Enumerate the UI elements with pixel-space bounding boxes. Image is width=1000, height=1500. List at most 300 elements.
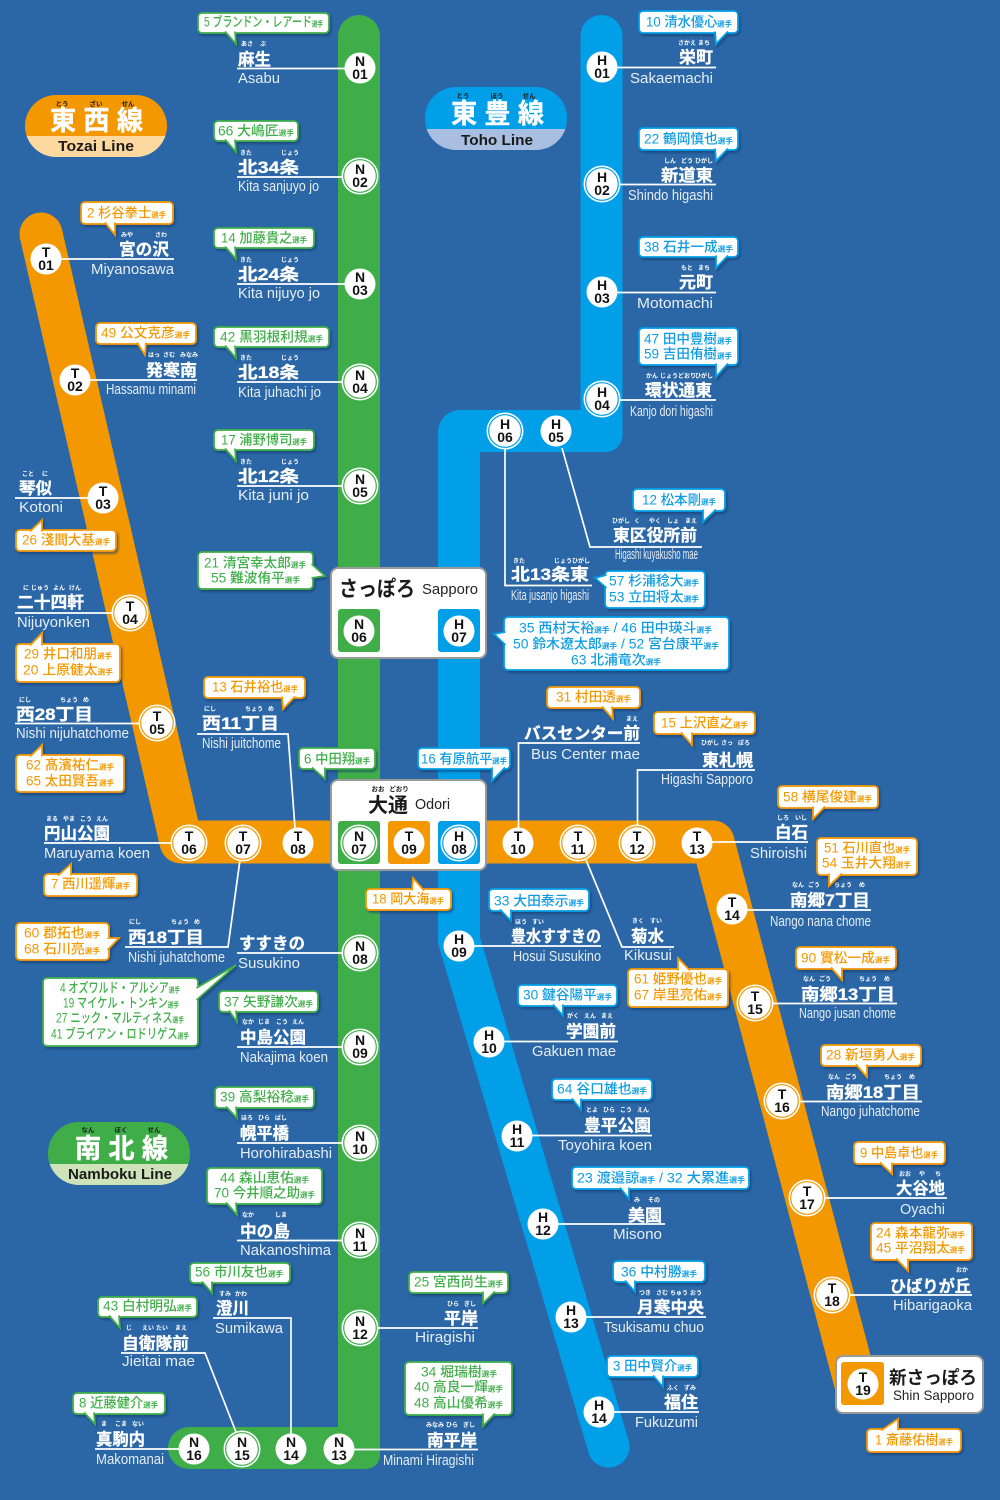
badge: Namboku Line: 南 北 線 (75, 1134, 168, 1164)
callout: 44 森山恵佑 / 70 今井順之助 (207, 1168, 322, 1215)
station label: 月寒中央: ちゅう (670, 1289, 688, 1297)
station label: 宮の沢: 宮の沢 (119, 240, 170, 259)
station label: 白石: 白石 (775, 823, 808, 842)
markers: Tozai line stations: 02 (67, 378, 83, 394)
callout: 35 西村天裕 / 46 田中瑛斗 / 50 鈴木遼太郎 / 52 宮台康平 / 63 北浦竜次 (494, 617, 729, 670)
markers: Namboku line stations: 09 (352, 1045, 368, 1061)
markers: Namboku line stations: N (355, 1225, 365, 1241)
callout: 13 石井裕也: 13 石井裕也選手 (212, 680, 298, 694)
callout: 90 實松一成: 90 實松一成選手 (801, 950, 891, 966)
callout: 7 西川遥輝 (44, 864, 137, 896)
markers: Toho line stations: 06 (497, 429, 513, 445)
station box: Shin Sapporo: 新さっぽろ (889, 1367, 977, 1388)
callout: 1 斎藤佑樹 (867, 1419, 961, 1452)
markers: Toho line stations: 01 (594, 65, 610, 81)
station label: 環状通東: Kanjo dori higashi (630, 404, 713, 420)
markers: Tozai line stations: T (574, 828, 583, 844)
callout: 44 森山恵佑 / 70 今井順之助: 70 今井順之助選手 (214, 1184, 315, 1200)
callout: 9 中島卓也 (854, 1142, 945, 1174)
station box: Odori: 09 (401, 841, 417, 857)
station box: Odori: 08 (451, 841, 467, 857)
station label: 北34条: じょう (281, 149, 299, 157)
markers: Tozai line stations: 14 (724, 907, 740, 923)
callout: 38 石井一成: 38 石井一成選手 (644, 240, 734, 254)
station box: Sapporo: N (354, 616, 364, 632)
markers: Tozai line stations: 06 (181, 841, 197, 857)
callout: 6 中田翔: 6 中田翔選手 (304, 752, 370, 766)
station box: Sapporo: H (454, 616, 464, 632)
station label: 東札幌: さっ (721, 740, 733, 747)
station label: 西11丁目: にし (204, 706, 216, 713)
station label: 真駒内: ま (101, 1421, 107, 1428)
markers: Toho line stations: 09 (451, 944, 467, 960)
callout: 28 新垣勇人: 28 新垣勇人選手 (826, 1048, 916, 1062)
station label: 北18条: じょう (281, 354, 299, 362)
callout: 47 田中豊樹 / 59 吉田侑樹 (639, 328, 738, 377)
station label: 南郷7丁目 (747, 881, 871, 930)
callout: 57 杉浦稔大 / 53 立田将太 (595, 571, 705, 608)
callout: 18 岡大海 (366, 878, 451, 910)
station label: ひばりが丘: ひばりが丘 (890, 1276, 971, 1296)
station label: 福住: Fukuzumi (635, 1415, 698, 1431)
station label: 麻生: ぶ (260, 41, 266, 48)
markers: Tozai line stations: T (239, 828, 248, 844)
callout: 58 横尾俊建 (778, 786, 878, 819)
station label: 中島公園: えん (292, 1018, 304, 1026)
markers: Toho line stations: 04 (594, 397, 610, 413)
station box: Odori: おお (372, 785, 385, 793)
station label: 新道東: ひがし (695, 157, 713, 165)
callout: 15 上沢直之 (654, 712, 755, 745)
callout: 8 近藤健介 (73, 1393, 165, 1424)
callout: 25 宮西尚生: 25 宮西尚生選手 (414, 1274, 504, 1290)
station label: 中の島: しま (275, 1212, 287, 1219)
station label: 北34条: きた (240, 149, 252, 157)
station label: 西11丁目: め (268, 706, 274, 713)
callout: 14 加藤貴之 (214, 228, 314, 259)
station label: 大谷地: おお (899, 1171, 911, 1178)
markers: Namboku line stations: 12 (352, 1326, 368, 1342)
badge: Namboku Line: なん (82, 1125, 95, 1134)
markers: Namboku line stations: N (237, 1434, 247, 1450)
station box: Shin Sapporo: T (859, 1369, 868, 1385)
station label: 白石: いし (795, 815, 807, 822)
station label: 美園: 美園 (628, 1206, 662, 1225)
markers: Toho line stations (444, 52, 620, 1428)
station label: 発寒南: さむ (163, 352, 175, 359)
markers: Tozai line stations: T (126, 598, 135, 614)
callout: 62 髙濱祐仁 / 65 太田賢吾: 62 髙濱祐仁選手 (26, 756, 115, 772)
station label: 北24条: きた (240, 256, 252, 264)
station label: 二十四軒: けん (69, 585, 81, 592)
station label: 豊平公園: ひら (603, 1107, 615, 1114)
station box: Odori: Odori (415, 796, 450, 813)
callout: 56 市川友也 (190, 1263, 290, 1293)
station label: 東区役所前 (562, 448, 702, 563)
station label: 幌平橋: 幌平橋 (240, 1124, 289, 1143)
markers: Namboku line stations: N (334, 1434, 344, 1450)
station label: 元町 (617, 264, 716, 312)
callout: 43 白村明弘 (98, 1297, 197, 1328)
station label: 宮の沢: Miyanosawa (91, 262, 175, 278)
markers: Namboku line stations: N (355, 1032, 365, 1048)
station label: 栄町: さかえ (678, 39, 696, 47)
station label: 北12条: じょう (281, 458, 299, 466)
markers: Toho line stations: H (597, 384, 607, 400)
callout: 24 森本龍弥 / 45 平沼翔太: 24 森本龍弥選手 (876, 1224, 966, 1240)
markers: Toho line stations: H (512, 1121, 522, 1137)
markers: Namboku line stations: N (355, 1313, 365, 1329)
callout: 18 岡大海: 18 岡大海選手 (372, 892, 444, 906)
station label: 南郷18丁目: ごう (845, 1073, 857, 1081)
station label: 大谷地: 大谷地 (896, 1179, 945, 1198)
callout: 10 清水優心 (639, 11, 738, 44)
station label: 自衛隊前: えい (142, 1324, 154, 1332)
station label: 北18条 (237, 354, 345, 401)
badge: Tozai Line: Tozai Line (58, 138, 134, 155)
station label: 北18条: きた (240, 354, 252, 362)
markers: Toho line stations: 02 (594, 182, 610, 198)
station label: 菊水: きく (632, 918, 644, 925)
station label: 自衛隊前: たい (156, 1324, 168, 1332)
callout: 49 公文克彦: 49 公文克彦選手 (101, 326, 191, 340)
station label: 澄川: すみ (219, 1291, 231, 1298)
callout: 5 ブランドン・レアード (198, 13, 329, 44)
station label: 琴似: 琴似 (19, 479, 52, 498)
line: Toho (438, 15, 630, 1468)
markers: Toho line stations: H (597, 277, 607, 293)
callout: 22 鶴岡慎也: 22 鶴岡慎也選手 (644, 130, 734, 146)
callout: 34 堀瑞樹 / 40 高良一輝 / 48 高山優希: 34 堀瑞樹選手 (421, 1364, 498, 1380)
station label: 南郷7丁目: ごう (808, 881, 820, 889)
station label: 円山公園: Maruyama koen (44, 846, 150, 862)
station label: 環状通東: 環状通東 (645, 381, 713, 400)
station label: 中島公園: じま (258, 1019, 270, 1026)
station box: Sapporo: Sapporo (422, 581, 478, 598)
markers: Namboku line stations (178, 52, 378, 1468)
station label: 美園 (558, 1197, 665, 1243)
station label: 月寒中央 (586, 1289, 706, 1336)
station label: 西28丁目 (15, 696, 140, 742)
callout: 31 村田透: 31 村田透選手 (556, 690, 632, 704)
badge: Tozai Line: とう (56, 99, 68, 108)
station label: 円山公園: やま (63, 815, 75, 823)
station label: 南平岸: みなみ (426, 1421, 444, 1429)
markers: Tozai line stations (30, 244, 850, 1314)
badge: Namboku Line: ぼく (114, 1125, 128, 1134)
station label: 西28丁目: にし (19, 697, 31, 704)
station label: 豊平公園: こう (620, 1106, 632, 1114)
markers: Tozai line stations: 05 (149, 721, 165, 737)
markers: Tozai line stations: T (185, 828, 194, 844)
callout: 4 foreign players (43, 965, 236, 1046)
station label: 平岸: ぎし (464, 1300, 476, 1308)
station label: 環状通東: どおり (678, 372, 696, 380)
callout: 14 加藤貴之: 14 加藤貴之選手 (221, 230, 307, 246)
station label: 発寒南: みなみ (180, 351, 198, 359)
station label: 北24条: 北24条 (238, 264, 300, 284)
markers: Toho line stations: H (566, 1302, 576, 1318)
callout: 62 髙濱祐仁 / 65 太田賢吾: 65 太田賢吾選手 (26, 774, 115, 788)
station label: 北24条: Kita nijuyo jo (238, 286, 320, 302)
station label: 新道東: しん (664, 158, 676, 165)
station label: 月寒中央: Tsukisamu chuo (604, 1320, 704, 1336)
station label: 南平岸: ぎし (463, 1421, 475, 1429)
station label: 中の島 (237, 1211, 345, 1259)
station box: Odori: T (405, 828, 414, 844)
station label: 南郷18丁目 (797, 1073, 922, 1120)
station label: 南郷18丁目: 南郷18丁目 (826, 1083, 920, 1102)
markers: Toho line stations: 11 (510, 1134, 525, 1150)
markers: Tozai line stations: T (693, 828, 702, 844)
station label: 中島公園: こう (276, 1018, 288, 1026)
station label: 中の島: なか (242, 1211, 254, 1219)
callout: 57 杉浦稔大 / 53 立田将太: 53 立田将太選手 (609, 590, 700, 604)
station label: 琴似: に (42, 471, 48, 478)
station box: Shin Sapporo: 19 (855, 1382, 871, 1398)
station label: 福住 (614, 1384, 699, 1431)
markers: Toho line stations: 12 (535, 1222, 551, 1238)
callout: 24 森本龍弥 / 45 平沼翔太: 45 平沼翔太選手 (876, 1240, 966, 1256)
station label: 北34条 (237, 149, 345, 195)
callout: 29 井口和朋 / 20 上原健太 (16, 633, 120, 682)
callout: 61 姫野優也 / 67 岸里亮佑: 67 岸里亮佑選手 (634, 986, 723, 1002)
callout: 2 杉谷拳士 (81, 202, 173, 235)
station label: 北13条東: きた (513, 557, 525, 565)
markers: Tozai line stations: T (751, 988, 760, 1004)
station label: 南郷18丁目: め (909, 1074, 915, 1081)
station label: 大谷地: ち (935, 1170, 941, 1178)
station label: 発寒南: はっ (148, 352, 160, 359)
station label: 北13条東: じょう (554, 557, 572, 565)
callout: 66 大嶋匠 (214, 121, 298, 152)
station label: 北12条: Kita juni jo (238, 488, 309, 504)
callout: 24 森本龍弥 / 45 平沼翔太 (871, 1223, 972, 1271)
station label: 自衛隊前: Jieitai mae (122, 1354, 195, 1370)
station label: 真駒内 (95, 1420, 180, 1468)
station label: 南郷18丁目: Nango juhatchome (821, 1104, 920, 1120)
markers: Tozai line stations: 16 (774, 1099, 790, 1115)
markers: Tozai line stations: T (99, 483, 108, 499)
callout: 51 石川直也 / 54 玉井大翔 (817, 838, 917, 886)
callout: 39 高梨裕稔 (215, 1087, 314, 1118)
markers: Tozai line stations: T (778, 1086, 787, 1102)
station label: 自衛隊前: じ (126, 1325, 132, 1332)
callout: 47 田中豊樹 / 59 吉田侑樹: 59 吉田侑樹選手 (644, 346, 733, 362)
markers: Namboku line stations: 10 (352, 1141, 368, 1157)
station label: 環状通東 (620, 372, 716, 420)
station label: 麻生: Asabu (238, 71, 280, 87)
line: Namboku (168, 15, 380, 1469)
station label: 学園前 (504, 1012, 618, 1060)
station label: 東札幌: ぽろ (738, 739, 750, 747)
callout: 3 田中賢介 (607, 1356, 698, 1387)
station label: 麻生 (237, 41, 345, 87)
badge: Toho Line: 東 豊 線 (451, 99, 544, 129)
callout: 16 有原航平 (418, 748, 510, 781)
station label: 中島公園: なか (242, 1018, 254, 1026)
station box: Sapporo: 06 (351, 629, 367, 645)
markers: Tozai line stations: 12 (629, 841, 645, 857)
station label: 自衛隊前 (121, 1324, 236, 1432)
station label: 西18丁目 (125, 860, 240, 966)
station label: 幌平橋: ばし (275, 1114, 287, 1122)
station label: 東区役所前: Higashi kuyakusho mae (615, 547, 698, 563)
station label: 学園前: がく (567, 1012, 579, 1020)
badge: Namboku Line: せん (148, 1126, 161, 1134)
station label: 円山公園: 円山公園 (44, 824, 110, 843)
station box: Odori: H (454, 828, 464, 844)
station label: 美園: その (648, 1197, 660, 1204)
callout: 34 堀瑞樹 / 40 高良一輝 / 48 高山優希 (405, 1362, 512, 1426)
markers: Namboku line stations: N (355, 1128, 365, 1144)
station label: 南平岸: 南平岸 (427, 1431, 477, 1450)
markers: Namboku line stations: 08 (352, 951, 368, 967)
callout: 29 井口和朋 / 20 上原健太: 29 井口和朋選手 (24, 646, 113, 662)
callout: 35 西村天裕 / 46 田中瑛斗 / 50 鈴木遼太郎 / 52 宮台康平 / 63 北浦竜次: 50 鈴木遼太郎 選手 / 52 宮台康平 選手 (513, 636, 720, 652)
station label: 東札幌: ひがし (701, 739, 719, 747)
station label: 北13条東: Kita jusanjo higashi (511, 588, 589, 604)
callout: 25 宮西尚生 (409, 1272, 508, 1303)
markers: Tozai line stations: 10 (510, 841, 526, 857)
station label: 西28丁目: ちょう (60, 696, 78, 704)
markers: Tozai line stations: T (828, 1280, 837, 1296)
station label: 発寒南 (90, 351, 198, 398)
station label: 琴似: Kotoni (19, 500, 63, 516)
station label: 北13条東 (505, 448, 592, 604)
station label: 豊平公園: 豊平公園 (584, 1115, 651, 1135)
station label: 真駒内: 真駒内 (96, 1430, 145, 1449)
station label: 南郷7丁目: ちょう (834, 881, 852, 889)
callout: 57 杉浦稔大 / 53 立田将太: 57 杉浦稔大選手 (609, 572, 700, 588)
station label: 新道東: Shindo higashi (628, 188, 713, 204)
markers: Namboku line stations: 14 (283, 1447, 299, 1463)
markers: Toho line stations: H (594, 1397, 604, 1413)
station label: 豊平公園: えん (637, 1106, 649, 1114)
markers: Namboku line stations: N (355, 471, 365, 487)
station label: 澄川: かわ (235, 1290, 247, 1298)
station label: 西11丁目: ちょう (245, 705, 263, 713)
station label: 北13条東: 北13条東 (511, 564, 590, 584)
callout: 12 松本剛: 12 松本剛選手 (642, 492, 716, 508)
badge: Toho Line: せん (522, 92, 536, 100)
callout: 30 鍵谷陽平: 30 鍵谷陽平選手 (523, 986, 613, 1002)
station label: 宮の沢: みや (121, 231, 133, 239)
station label: 南郷13丁目: ちょう (859, 975, 877, 983)
station label: 菊水 (586, 860, 674, 964)
station label: 北18条: Kita juhachi jo (238, 385, 321, 401)
station label: バスセンター前: バスセンター前 (524, 724, 640, 743)
station label: 二十四軒: じゅう (31, 584, 49, 592)
callout: 61 姫野優也 / 67 岸里亮佑: 61 姫野優也選手 (634, 972, 723, 986)
markers: Tozai line stations: T (633, 828, 642, 844)
station label: 澄川: Sumikawa (215, 1321, 284, 1337)
callout: 28 新垣勇人 (821, 1045, 921, 1077)
station label: すすきの: すすきの (239, 934, 305, 953)
markers: Toho line stations: H (500, 416, 510, 432)
badge: Tozai Line: ざい (90, 99, 103, 108)
station label: 麻生: 麻生 (238, 50, 271, 69)
station label: 北12条: きた (240, 458, 252, 466)
station label: 東区役所前: やく (649, 517, 661, 525)
markers: Tozai line stations: T (803, 1183, 812, 1199)
badge: Tozai Line (25, 95, 167, 157)
station label: 菊水: Kikusui (624, 948, 672, 964)
markers: Namboku line stations: 04 (352, 380, 368, 396)
station label: 新道東 (620, 157, 716, 204)
station label: 二十四軒: Nijuyonken (17, 615, 90, 631)
station label: 北24条 (237, 256, 345, 302)
station label: 中島公園 (237, 1018, 345, 1066)
callout: 33 大田泰示: 33 大田泰示選手 (494, 892, 585, 908)
station label: 南郷13丁目: なん (803, 975, 815, 983)
callout: 60 郡拓也 / 68 石川亮: 60 郡拓也選手 (24, 926, 101, 940)
callout: 60 郡拓也 / 68 石川亮: 68 石川亮選手 (24, 940, 101, 956)
station label: 二十四軒: に (23, 585, 29, 592)
station label: 幌平橋: Horohirabashi (240, 1146, 332, 1162)
station label: 南郷13丁目: 南郷13丁目 (801, 985, 895, 1004)
callout: 56 市川友也: 56 市川友也選手 (195, 1264, 284, 1280)
markers: Tozai line stations: 03 (95, 496, 111, 512)
badge: Toho Line (425, 87, 567, 150)
callout: 49 公文克彦 (96, 323, 196, 355)
station label: 豊平公園: とよ (586, 1107, 598, 1114)
markers: Namboku line stations: N (355, 269, 365, 285)
station label: バスセンター前: まえ (626, 715, 638, 723)
station label: 西18丁目: 西18丁目 (128, 929, 204, 947)
callout: 13 石井裕也 (204, 677, 305, 709)
markers: Toho line stations: 10 (481, 1040, 497, 1056)
markers: Tozai line stations: T (153, 708, 162, 724)
station label: 新道東: 新道東 (661, 166, 714, 185)
station box: Sapporo: さっぽろ (339, 577, 415, 601)
station label: 学園前: えん (584, 1012, 596, 1020)
callout: 15 上沢直之: 15 上沢直之選手 (661, 716, 748, 730)
markers: Namboku line stations: 01 (352, 66, 368, 82)
callout: 47 田中豊樹 / 59 吉田侑樹: 47 田中豊樹選手 (644, 332, 733, 346)
station label: 澄川: 澄川 (216, 1299, 249, 1318)
callout: 37 矢野謙次: 37 矢野謙次選手 (224, 994, 314, 1010)
callout: 17 浦野博司 (214, 430, 314, 461)
markers: Tozai line stations: 11 (571, 841, 586, 857)
station box: Odori: どおり (389, 784, 409, 793)
station label: 大谷地: や (919, 1170, 925, 1178)
station label: 真駒内: こま (115, 1421, 127, 1428)
badge: Toho Line: ほう (490, 91, 504, 100)
station label: 美園: Misono (613, 1227, 662, 1243)
station label: 南郷18丁目: なん (828, 1073, 840, 1081)
callout: 12 松本剛 (633, 489, 725, 522)
station label: 宮の沢: さわ (155, 231, 167, 239)
station label: すすきの (237, 934, 345, 972)
markers: Tozai line stations: T (71, 365, 80, 381)
station label: 豊水すすきの: 豊水すすきの (511, 926, 601, 946)
markers: Namboku line stations: 03 (352, 282, 368, 298)
callout: 4 foreign players: 4 オズワルド・アルシア選手 (60, 980, 180, 996)
station label: 西11丁目: 西11丁目 (202, 715, 279, 733)
callout: 33 大田泰示 (489, 889, 589, 921)
markers: Toho line stations: H (538, 1209, 548, 1225)
station label: 幌平橋: ひら (258, 1115, 270, 1122)
station box: Shin Sapporo (836, 1356, 983, 1413)
callout: 42 黒羽根利規 (214, 327, 329, 358)
station label: 南郷7丁目: なん (792, 881, 804, 889)
station label: 東札幌 (638, 739, 755, 828)
station label: 東区役所前: 東区役所前 (613, 526, 697, 545)
markers: Namboku line stations: N (189, 1434, 199, 1450)
station label: 自衛隊前: まえ (175, 1324, 187, 1332)
badge: Tozai Line: 東 西 線 (50, 106, 143, 136)
